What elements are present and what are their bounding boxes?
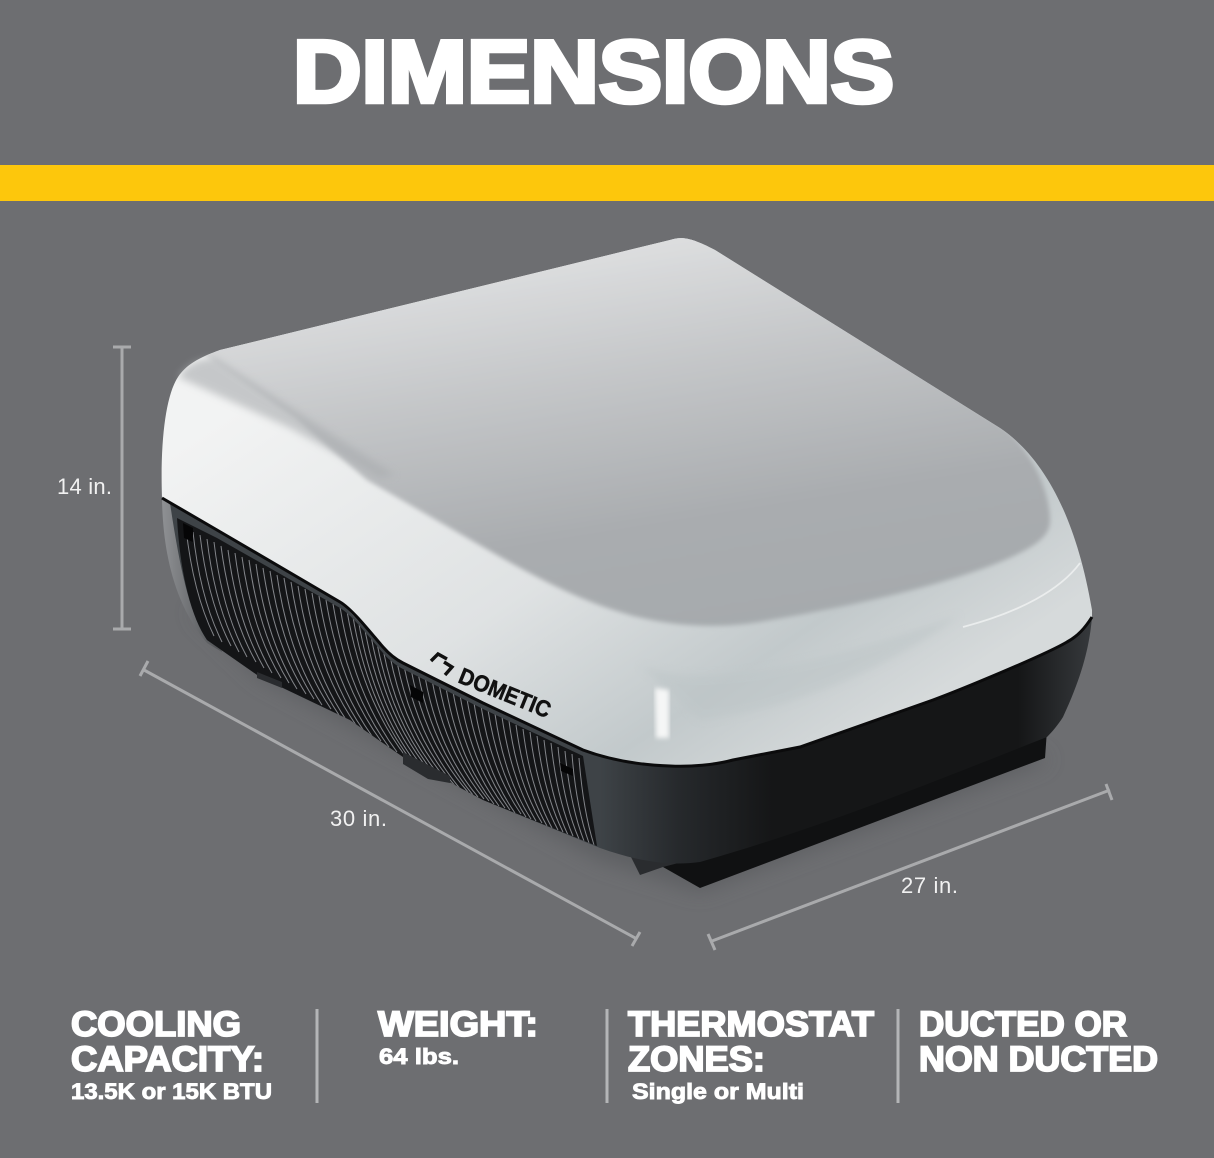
product: air conditioner unit [162,232,1092,892]
spec: thermostat zones: ZONES: [628,1040,765,1079]
length label: 30 in. [330,806,387,831]
logo text: DOMETIC [455,663,555,723]
corner highlight [963,563,1080,627]
spec: ducted [919,1005,1158,1079]
dimension: width [708,784,1112,950]
dimension: height [57,347,131,629]
width line [708,784,1112,950]
length line [140,661,640,946]
ground shadow [190,610,1050,892]
spec: cooling capacity [71,1005,272,1104]
shell edge highlight [178,358,395,478]
spec: cooling capacity: CAPACITY: [71,1040,264,1079]
spec: ducted: NON DUCTED [919,1040,1158,1079]
mounting feet [257,672,450,783]
cooling heading: COOLING [71,1005,241,1044]
rear foot [630,855,690,875]
weight value: 64 lbs. [379,1044,459,1069]
height label: 14 in. [57,474,112,499]
side grille [177,518,597,846]
left side of base [162,498,222,652]
thermostat value: Single or Multi [632,1079,804,1104]
ducted text: DUCTED OR [919,1005,1127,1044]
grille slats [186,528,594,845]
lower band shading [640,615,960,720]
dimension: length [140,661,640,946]
seam line [162,498,1092,766]
brand logo [431,654,555,723]
spec: weight [378,1005,538,1069]
title: DIMENSIONS [293,22,894,121]
thermostat heading: THERMOSTAT [628,1005,874,1044]
spec: thermostat zones [628,1005,874,1104]
yellow divider band [0,165,1214,201]
shell top face [197,232,1050,626]
logo mark [431,654,452,675]
height line [113,347,131,629]
width label: 27 in. [901,873,958,898]
cooling value: 13.5K or 15K BTU [71,1079,272,1104]
grille clips [183,523,573,776]
main foot [663,730,1047,888]
white shell [162,238,1092,766]
dark base [170,503,1092,863]
weight heading: WEIGHT: [378,1005,538,1044]
corner sheen [655,688,669,738]
